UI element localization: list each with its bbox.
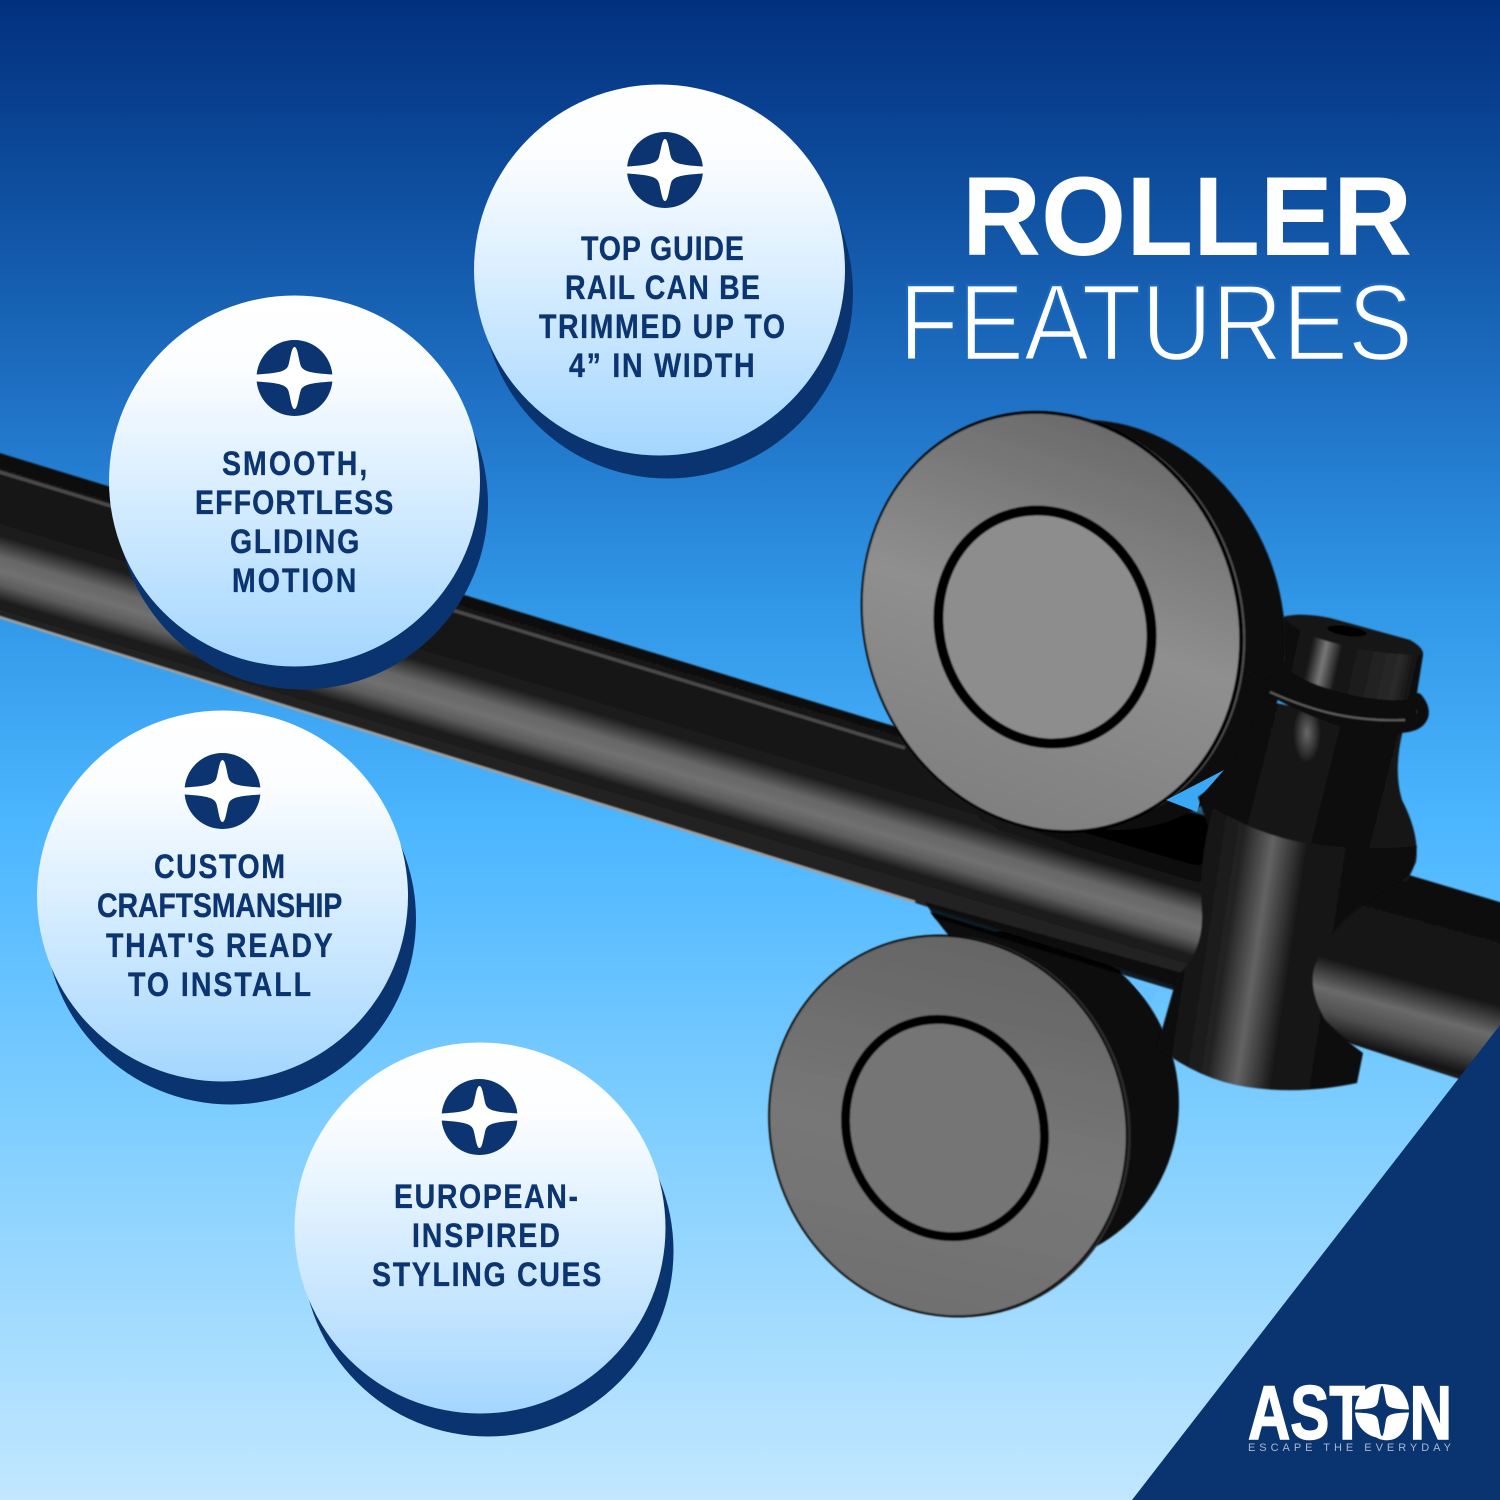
panel: smooth gliding [109, 296, 488, 690]
feature text: EFFORTLESS [195, 484, 393, 522]
panel: european styling [294, 1042, 674, 1436]
panel: top guide rail [474, 84, 853, 478]
title line: FEATURES: FEATURES [899, 262, 1413, 384]
bottom roller wheel [715, 884, 1226, 1368]
rail upper groove [0, 463, 905, 748]
feature text: GLIDING [230, 523, 359, 561]
feature text: RAIL CAN BE [565, 269, 760, 307]
feature text: THAT'S READY [106, 927, 333, 965]
feature text: EUROPEAN- [394, 1178, 578, 1216]
roller bracket [1157, 615, 1423, 1090]
bracket ring [1250, 678, 1423, 727]
feature text: STYLING CUES [372, 1256, 601, 1294]
feature text: CRAFTSMANSHIP [97, 887, 342, 925]
feature text [372, 1178, 601, 1294]
rail right section [1210, 816, 1500, 1102]
logo O disc with star [1355, 1384, 1409, 1438]
guide rail [0, 444, 1500, 1102]
feature text: CUSTOM [154, 848, 285, 886]
feature text: TO INSTALL [128, 966, 311, 1004]
feature text: 4” IN WIDTH [569, 347, 755, 385]
bracket cap [1283, 615, 1423, 700]
feature text [97, 848, 342, 1004]
rail lower edge highlight [0, 608, 915, 902]
icon: star badge [442, 1079, 518, 1155]
gaps showing background behind bracket [1130, 770, 1224, 1004]
feature text [195, 445, 393, 600]
bracket clamp [1157, 808, 1417, 1090]
title line: ROLLER: ROLLER [962, 154, 1412, 279]
bracket neck [1198, 700, 1417, 882]
feature text: TOP GUIDE [581, 230, 744, 268]
feature text: MOTION [232, 562, 356, 600]
logo tagline: ESCAPE THE EVERYDAY [1248, 1442, 1452, 1454]
icon: star badge [184, 753, 260, 829]
title [899, 154, 1413, 384]
bracket body under cap [1262, 660, 1417, 726]
icon: star badge [256, 340, 332, 416]
corner triangle [1132, 1025, 1500, 1500]
feature text: SMOOTH, [222, 445, 367, 483]
panel: custom craftsmanship [37, 710, 416, 1104]
icon: star badge [627, 132, 703, 208]
feature text: TRIMMED UP TO [539, 308, 785, 346]
feature text [539, 230, 785, 385]
feature text: INSPIRED [412, 1217, 560, 1255]
neck highlight [1293, 703, 1321, 763]
top roller wheel [802, 357, 1342, 887]
